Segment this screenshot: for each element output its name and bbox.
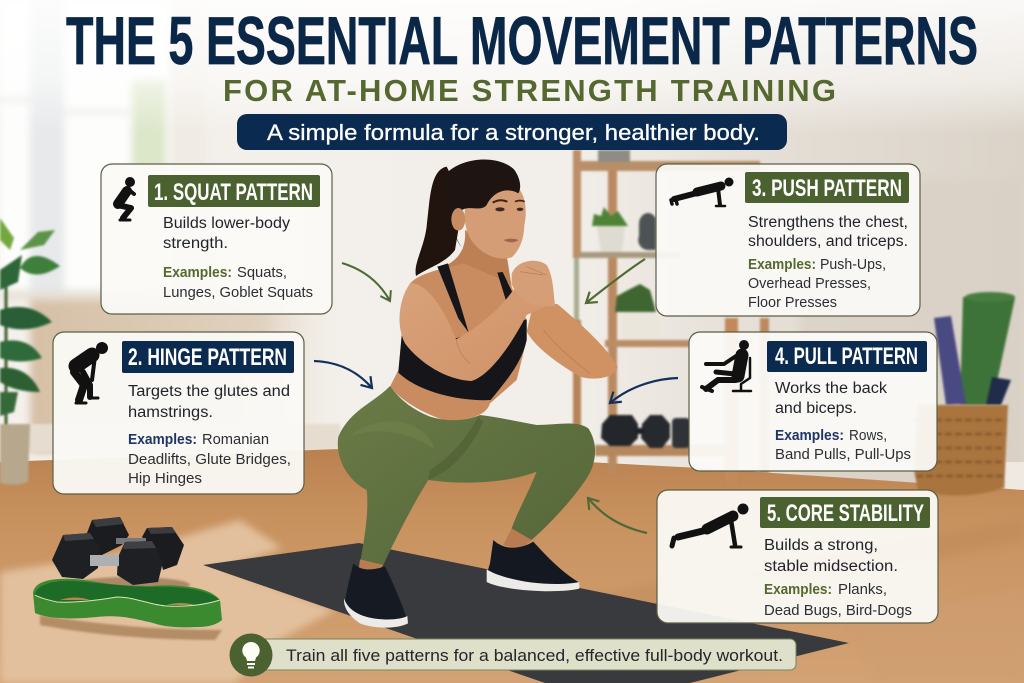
text: hinge description: hamstrings. [128,404,213,421]
head [465,187,526,258]
rack dumbbells [601,415,638,446]
heading: squat pattern: 1. SQUAT PATTERN [154,179,313,206]
heading: squat pattern [148,175,320,207]
callout: footer message: Train all five patterns for a balanced, effective full-body workout. [286,646,783,665]
text: push description [748,214,908,311]
tagline banner: A simple formula for a stronger, healthier body. [267,120,760,145]
text: hinge description: Romanian [202,431,269,448]
heading: core stability [760,497,930,528]
shelf plant [592,207,628,226]
icon: plank silhouette [672,504,748,547]
shelving unit [573,150,769,488]
text: squat description: strength. [163,235,228,252]
icon: light bulb [230,634,272,676]
heading: hinge pattern: 2. HINGE PATTERN [128,344,287,371]
hair top [446,159,520,247]
neck [442,230,512,287]
arrow: core to woman [588,498,647,533]
heading: hinge pattern [122,341,294,373]
text: push description: Push-Ups, [820,256,886,273]
icon: push-up silhouette [671,178,734,206]
heading: pull pattern [767,341,927,372]
hands [512,261,555,307]
arrow: push to woman [586,259,645,303]
text: pull description [775,380,911,463]
far forearm [527,303,617,379]
text: hinge description [128,383,291,487]
heading: core stability: 5. CORE STABILITY [767,500,924,527]
text: squat description: Examples: [163,264,232,281]
text: pull description: Rows, [849,427,887,444]
woman squatting [338,159,617,628]
text: squat description: Lunges, Goblet Squats [163,284,313,301]
text: pull description: Works the back [775,380,887,397]
arrow: pull to woman [610,378,678,403]
text: push description: Examples: [748,256,816,273]
icon: resistance band [33,579,222,640]
text: hinge description: Deadlifts, Glute Bridges, [128,451,291,468]
floor [0,449,1024,683]
ear [451,208,465,231]
panel: 4 pull pattern [689,332,937,471]
text: push description: Overhead Presses, [748,275,871,292]
text: hinge description: Targets the glutes and [128,383,290,400]
icon: dumbbells on floor [52,517,190,593]
arrow: hinge to woman [314,361,372,388]
arrow: squat to woman [342,263,390,301]
text: core description [764,537,912,619]
kettlebell [638,213,656,250]
text: pull description: Examples: [775,427,844,444]
panel: 3 push pattern [656,164,920,316]
text: core description: Examples: [764,581,832,598]
floor plant [0,218,60,485]
panel: 2 hinge pattern [53,332,304,494]
ankles [358,559,383,577]
left shoe [345,563,407,627]
text: hinge description: Examples: [128,431,197,448]
face details [493,200,507,203]
text: pull description: and biceps. [775,400,857,417]
exercise mat [203,543,849,683]
text: squat description [163,215,313,301]
basket [914,405,1008,496]
near arm [400,283,545,381]
sports bra [398,319,527,400]
text: push description: shoulders, and triceps. [748,233,908,250]
heading: pull pattern: 4. PULL PATTERN [775,343,918,370]
text: core description: stable midsection. [764,558,898,575]
icon: hinge silhouette [74,342,108,403]
text: push description: Floor Presses [748,294,837,311]
icon: seated row silhouette [702,340,751,391]
text: core description: Dead Bugs, Bird-Dogs [764,602,912,619]
text: hinge description: Hip Hinges [128,470,202,487]
panel: 1 squat pattern [101,164,332,314]
ponytail [416,167,463,276]
text: pull description: Band Pulls, Pull-Ups [775,446,911,463]
text: squat description: Squats, [237,264,287,281]
leggings [338,386,595,566]
text: push description: Strengthens the chest, [748,214,908,231]
icon: squat silhouette [117,177,135,220]
rolled mats [934,292,1015,405]
right shoe [486,540,579,591]
heading: push pattern [745,172,909,203]
tagline banner [237,114,787,150]
heading: push pattern: 3. PUSH PATTERN [752,175,902,202]
top white fade [0,0,1024,135]
torso [390,263,527,422]
panel: 5 core stability [657,490,938,623]
text: core description: Planks, [838,581,887,598]
callout: footer message [230,634,796,676]
window [0,0,172,292]
text: squat description: Builds lower-body [163,215,290,232]
text: core description: Builds a strong, [764,537,878,554]
subtitle: FOR AT-HOME STRENGTH TRAINING [223,73,836,108]
